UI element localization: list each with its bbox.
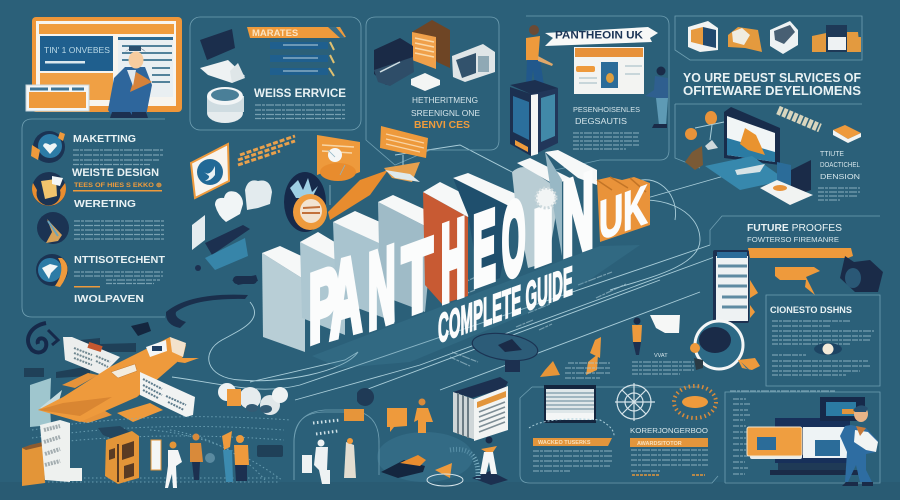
service caption 1: HETHERITMENG xyxy=(412,96,478,105)
dark skyline strip xyxy=(24,322,151,378)
icon: big monitor xyxy=(770,397,865,475)
title: PANTHEOIN: A xyxy=(330,234,362,361)
icon: compass xyxy=(615,383,655,421)
title 3D blocks xyxy=(262,150,650,368)
icon: dark figure xyxy=(840,256,883,292)
connector lines xyxy=(172,145,745,400)
orange subline: TEES OF HIES S EKKO ⊕ xyxy=(74,182,163,189)
title: PANTHEOIN: E xyxy=(473,189,496,307)
icon: person at monitor xyxy=(108,46,152,118)
icon: twitter card xyxy=(191,144,229,198)
icon: map circle xyxy=(36,254,68,287)
title: PANTHEOIN: H xyxy=(441,197,466,326)
service caption orange: BENVI CES xyxy=(414,119,470,131)
future subheading: FOWTERSO FIREMANRE xyxy=(747,237,839,244)
icon: people group xyxy=(151,431,283,488)
title: PANTHEOIN: I xyxy=(532,189,554,284)
block: H xyxy=(423,182,490,304)
icon: swirl xyxy=(28,323,58,352)
heading: involvement: IWOLPAVEN xyxy=(74,293,144,305)
block: T xyxy=(378,195,448,312)
software heading 1: YO URE DEUST SLRVICES OF xyxy=(683,70,861,85)
small device pill xyxy=(233,276,257,284)
icon: data cylinder xyxy=(207,87,244,123)
drone ring xyxy=(471,330,610,378)
software heading 2: OFITEWARE DEYELIOMENS xyxy=(683,83,861,98)
panel: left services list xyxy=(22,119,166,317)
panel: bottom content xyxy=(520,383,718,483)
icon: dark hook xyxy=(166,295,248,328)
caption 3: DENSION xyxy=(820,172,860,181)
orange note xyxy=(380,126,428,165)
panel: pantheon tower and screen xyxy=(510,25,668,156)
icon: person at screen xyxy=(645,66,668,128)
icon: books stack xyxy=(453,377,508,441)
chip grid xyxy=(238,136,295,165)
dotted waves xyxy=(32,417,290,482)
tags strip xyxy=(778,110,820,128)
title: PANTHEOIN xyxy=(309,152,594,365)
icon: airplane xyxy=(30,337,199,427)
icon: small laptop xyxy=(760,160,813,205)
title: PANTHEOIN: O xyxy=(502,179,525,301)
block: E xyxy=(453,173,530,285)
title: PANTHEOIN: P xyxy=(309,247,338,365)
block: A xyxy=(300,232,353,335)
subtitle: complete guide: COMPLETE GUIDE xyxy=(438,257,573,352)
panel: marketing banner and service xyxy=(200,27,346,123)
service heading: WEISS ERRVICE xyxy=(254,88,346,100)
icon: magnifier xyxy=(690,321,760,372)
heading: tech: NTTISOTECHENT xyxy=(74,254,166,266)
icon: developer person xyxy=(840,405,878,486)
icon: buildings xyxy=(22,420,82,486)
icon: figure on pedestal xyxy=(472,436,508,485)
icon: heart circle xyxy=(31,131,65,163)
caption 1: TTIUTE xyxy=(820,149,844,158)
icon: what figure and note xyxy=(632,315,694,374)
panel: right people arc xyxy=(294,388,433,484)
cionesto heading: CIONESTO DSHNS xyxy=(770,305,852,315)
icon: gear on O xyxy=(536,188,556,208)
icon: tower xyxy=(510,80,558,156)
UK blocks xyxy=(597,177,650,242)
panel: services devices xyxy=(374,20,495,131)
reflection xyxy=(312,245,640,368)
icon: standing person xyxy=(526,25,553,85)
title: PANTHEOIN: N xyxy=(562,152,594,279)
title: UK: UK xyxy=(599,173,647,252)
panel: cionesto designs xyxy=(766,295,880,386)
rolls cluster xyxy=(218,383,288,415)
panel: developer at monitor xyxy=(725,391,880,486)
heading: website design: WEISTE DESIGN xyxy=(72,167,159,179)
icon: orange gadget xyxy=(833,125,861,143)
service caption 2: SREENIGNL ONE xyxy=(411,108,480,118)
block: P xyxy=(262,246,325,352)
block: I N xyxy=(545,150,597,256)
monitor headline: TIN' 1 ONVEBES xyxy=(44,45,110,55)
device on pad xyxy=(381,455,463,486)
icons row xyxy=(688,21,861,54)
heading right: KORERJONGERBOO xyxy=(630,428,709,435)
icon: tilted monitor xyxy=(685,107,786,190)
icon: clouds xyxy=(215,180,272,222)
icon: orange card xyxy=(747,427,802,459)
icon: orange kiosk xyxy=(98,426,139,484)
scattered path labels xyxy=(450,272,626,366)
title: PANTHEOIN: N xyxy=(368,223,395,351)
title: PANTHEOIN: T xyxy=(402,220,433,337)
brand banner text: PANTHEOIN UK xyxy=(555,30,643,42)
icon: gift ring xyxy=(32,172,66,206)
block: N xyxy=(333,211,412,322)
caption: PESENHOISENLES xyxy=(573,105,640,114)
orange tag 2: AWARDSITOTOR xyxy=(637,441,682,447)
banner label: MARATES xyxy=(252,28,298,39)
future heading: FUTURE PROOFES xyxy=(747,222,842,234)
phone list xyxy=(713,250,758,323)
panel: website monitor xyxy=(26,17,182,112)
panel: top services frames xyxy=(190,16,880,245)
orange tag 1: WACKEO TUSERKS xyxy=(538,440,591,446)
icon: shell circle xyxy=(37,212,69,244)
section: future proofes xyxy=(747,222,883,295)
block: O xyxy=(512,158,570,268)
heading: writing: WERETING xyxy=(74,198,136,210)
panel: software development xyxy=(683,21,861,205)
caption 2: DOACTICHEL xyxy=(820,160,860,169)
what label: VVAT xyxy=(654,353,668,359)
icon: dark screen xyxy=(544,385,596,423)
icon: sun xyxy=(674,386,716,418)
icon: web screen xyxy=(574,47,644,94)
dotted zone xyxy=(294,412,478,482)
caption line 2: DEGSAUTIS xyxy=(575,117,627,126)
heading: marketing: MAKETTING xyxy=(73,133,136,145)
laptop device small xyxy=(192,215,258,285)
icon: orange arm and disc xyxy=(284,135,420,232)
